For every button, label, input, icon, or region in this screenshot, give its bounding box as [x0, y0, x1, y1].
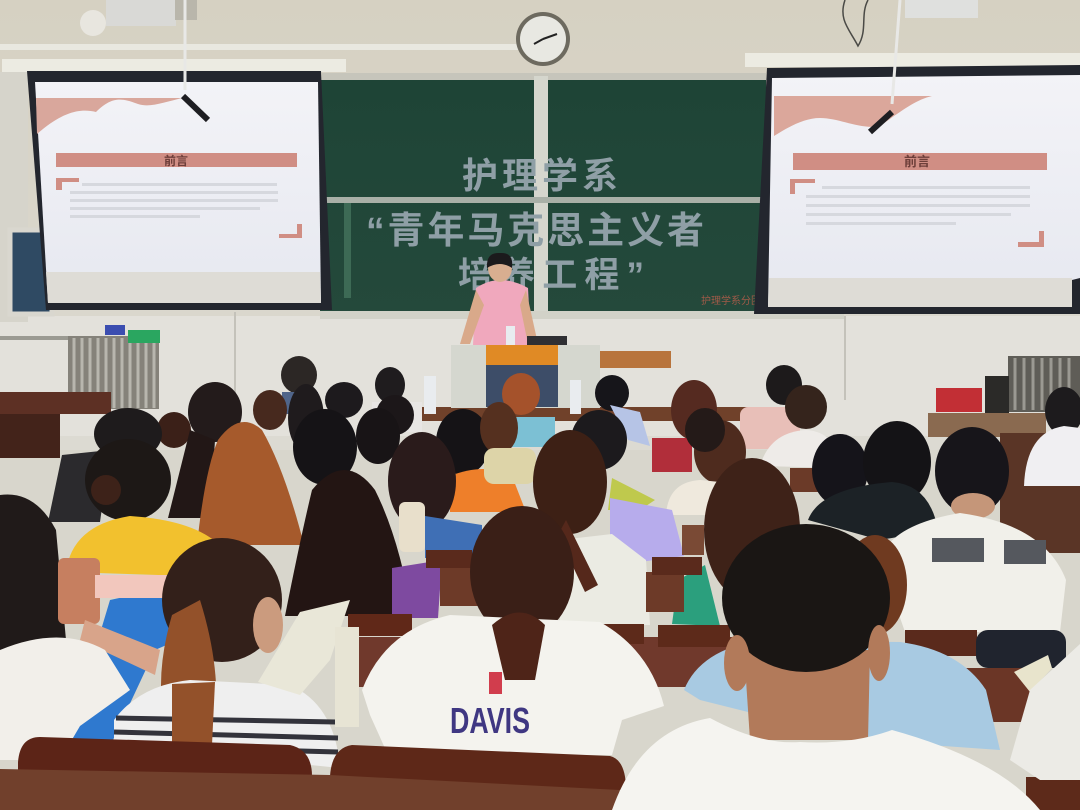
- slide heading: [56, 153, 297, 167]
- second row students: [0, 421, 1066, 742]
- front row girl reading papers: [0, 538, 359, 768]
- slide body lines: [70, 183, 278, 218]
- slide heading: [793, 153, 1047, 170]
- left projection screen: [27, 71, 332, 310]
- board slogan line two: 培养工程”: [458, 256, 644, 295]
- ceiling projectors and pipes: [0, 0, 1080, 80]
- middle and back row students: [48, 356, 1080, 522]
- slide body lines: [806, 186, 1030, 225]
- board title: 护理学系: [462, 155, 618, 196]
- window at left: [10, 230, 52, 314]
- middle desks: [348, 525, 1066, 722]
- right projection screen: 前言: [904, 154, 930, 169]
- teacher: [460, 253, 538, 345]
- third row students: [66, 402, 746, 576]
- front row student with blue shirt and boy in white: [612, 524, 1080, 810]
- left projection screen: 前言: [164, 153, 188, 168]
- front row student in DAVIS shirt: [362, 506, 664, 755]
- radiators and wall fixtures: [68, 325, 1080, 414]
- hanging microphones: [183, 0, 900, 132]
- right projection screen: [754, 65, 1080, 314]
- shirt lettering: DAVIS: [450, 700, 530, 741]
- back wall: [0, 0, 1080, 450]
- back desks: [0, 351, 1080, 553]
- board slogan: “青年马克思主义者: [366, 210, 704, 251]
- lectern: [424, 326, 600, 414]
- front chairs and desk: [0, 737, 1080, 810]
- blackboard: [320, 76, 844, 319]
- board signature: 护理学系分团委: [701, 294, 771, 307]
- wall clock: [516, 12, 570, 66]
